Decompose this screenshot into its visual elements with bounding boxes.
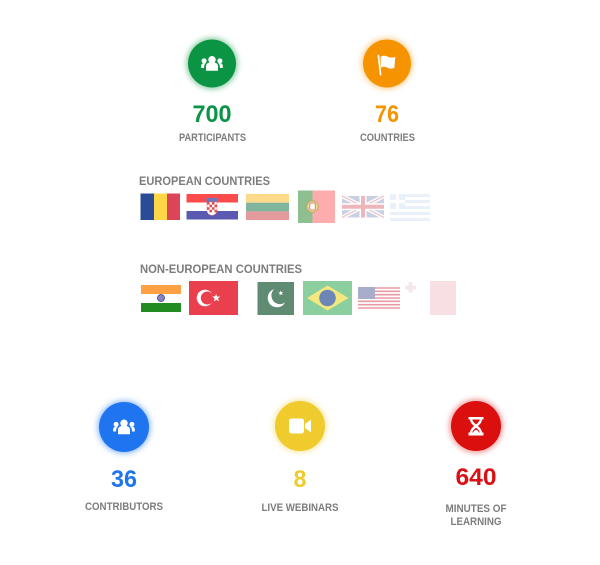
stat: countries	[360, 38, 415, 144]
flag: Portugal	[298, 190, 335, 223]
label: minutes of learning	[446, 503, 507, 528]
flag: Lithuania	[246, 194, 289, 220]
flag: Greece	[390, 194, 430, 221]
stat: contributors	[85, 400, 163, 513]
number: 36: 36	[111, 466, 137, 493]
flag: USA	[358, 287, 400, 309]
label: participants: PARTICIPANTS	[179, 132, 246, 144]
flag: Croatia	[186, 194, 238, 220]
icon: yellow video circle	[274, 400, 326, 452]
flag: faded pink	[430, 281, 456, 315]
label: countries: COUNTRIES	[360, 132, 415, 144]
flag: India	[141, 285, 181, 312]
icon: red hourglass circle	[450, 400, 502, 452]
icon: orange flag circle	[362, 38, 412, 89]
flag: Brazil	[303, 281, 352, 315]
number: 700: 700	[192, 101, 232, 128]
label: minutes of learning: LEARNING	[450, 516, 502, 528]
label: minutes of learning: MINUTES OF	[446, 503, 507, 515]
heading: non-european countries: NON-EUROPEAN COUNTRIES	[140, 262, 302, 276]
number: 76: 76	[375, 101, 399, 128]
heading: european countries: EUROPEAN COUNTRIES	[139, 174, 270, 188]
number: 8: 8	[294, 466, 306, 493]
flag: United Kingdom	[342, 196, 384, 218]
icon: green people circle	[186, 38, 238, 89]
flags: non-european row	[141, 281, 456, 315]
flag: Pakistan	[258, 282, 294, 315]
number: 640: 640	[456, 464, 496, 491]
stat: minutes of learning	[446, 400, 507, 528]
flags: european row	[140, 190, 430, 223]
stat: live webinars	[262, 400, 338, 514]
flag: Turkey	[189, 281, 238, 315]
stat: participants	[179, 38, 246, 144]
icon: blue people circle	[98, 400, 150, 454]
label: live webinars: LIVE WEBINARS	[262, 502, 338, 514]
label: contributors: CONTRIBUTORS	[85, 501, 163, 513]
flag: faded cross	[405, 282, 416, 292]
flag: Romania	[140, 194, 180, 220]
